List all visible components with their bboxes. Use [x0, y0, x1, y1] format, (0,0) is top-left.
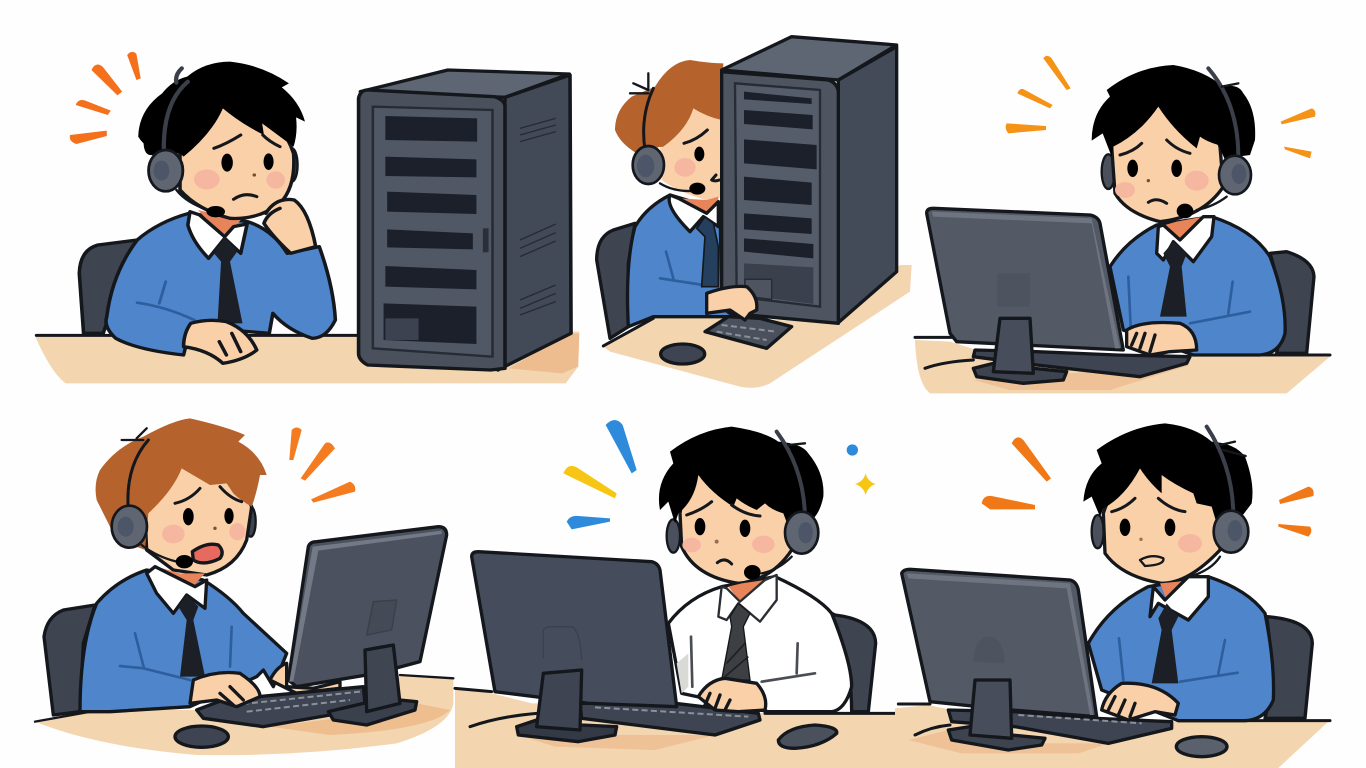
head [1083, 423, 1252, 583]
mouse [778, 725, 837, 748]
cheeks [162, 523, 245, 543]
monitor [288, 527, 447, 725]
desk [455, 688, 895, 768]
desk [35, 332, 579, 383]
server tower [359, 70, 571, 370]
body in blue shirt [627, 195, 760, 327]
head [1092, 65, 1255, 222]
chair [44, 605, 95, 715]
monitor stand [993, 318, 1033, 373]
headset [630, 73, 705, 195]
keyboard [705, 317, 792, 348]
monitor [927, 208, 1123, 383]
neck and collar [188, 210, 247, 258]
desk [895, 704, 1330, 768]
server drive slots [384, 116, 477, 344]
monitor [472, 552, 677, 742]
headset [1177, 68, 1251, 218]
monitor base [517, 720, 617, 742]
face [1103, 460, 1220, 583]
desk [35, 675, 453, 755]
orange stress marks [289, 427, 355, 503]
cheeks [1115, 171, 1209, 198]
left hand [190, 672, 260, 707]
monitor base [948, 727, 1045, 750]
chair [1265, 617, 1312, 718]
chair [1270, 252, 1314, 353]
scene: worker at monitor, bottom right [895, 423, 1330, 768]
cheeks [194, 169, 285, 189]
mouse [175, 726, 228, 747]
orange stress marks [1006, 56, 1315, 158]
hair [138, 62, 305, 157]
head [138, 62, 305, 218]
cable [470, 713, 537, 727]
facial features [687, 502, 760, 564]
chair [79, 240, 137, 333]
hand [1102, 683, 1178, 720]
headset [1190, 427, 1248, 577]
headset [112, 428, 193, 568]
neck and collar [1150, 577, 1208, 620]
desk [915, 337, 1330, 393]
facial features [1112, 498, 1185, 566]
keyboard [973, 350, 1190, 377]
keyboard [948, 710, 1172, 743]
hand [698, 678, 766, 712]
neck and collar [1157, 217, 1214, 262]
scene: worker beside server tower, hand on chin [35, 52, 579, 383]
cable [925, 360, 973, 368]
tie [178, 595, 205, 677]
hand on desk [184, 320, 257, 363]
head [659, 427, 823, 583]
right ear cup [286, 148, 297, 182]
body in blue shirt [106, 213, 335, 355]
orange stress marks [982, 437, 1314, 537]
facial features [214, 135, 280, 199]
face [145, 460, 252, 575]
tie [214, 237, 242, 323]
right hand behind monitor [270, 663, 340, 693]
orange stress marks [70, 52, 141, 144]
mouse [1176, 737, 1227, 757]
server tower [722, 37, 897, 323]
neck and collar [718, 575, 777, 622]
body in blue shirt [1110, 217, 1285, 355]
cheeks [682, 536, 775, 553]
monitor base [328, 700, 417, 725]
colourful stress marks [563, 420, 876, 529]
cheek [1178, 534, 1202, 553]
hand on keyboard [707, 286, 757, 320]
tie [697, 217, 718, 287]
neck and collar [147, 567, 207, 613]
hair [1083, 423, 1252, 523]
left ear cup [1102, 154, 1115, 189]
right ear cup [246, 507, 256, 537]
body in blue shirt [1088, 577, 1274, 721]
keyboard [580, 703, 760, 735]
scene: brown-haired worker talking, bottom left [35, 418, 453, 755]
face [680, 467, 792, 583]
mouse [661, 344, 705, 364]
head [96, 418, 267, 575]
hair [96, 418, 267, 550]
tie [722, 603, 750, 680]
body in blue shirt [80, 570, 287, 712]
cable [915, 725, 950, 735]
server drive slots [744, 92, 817, 258]
hair [1092, 65, 1255, 160]
hand [1127, 322, 1197, 355]
headset [149, 68, 225, 217]
monitor [902, 569, 1097, 750]
facial features [1120, 140, 1190, 203]
monitor stand [365, 645, 400, 712]
keyboard [197, 687, 365, 727]
facial features [175, 487, 242, 563]
monitor stand [970, 680, 1012, 738]
body in white shirt [668, 577, 852, 712]
chair [597, 223, 635, 338]
headset [744, 432, 818, 580]
hair [659, 427, 823, 527]
side vents [520, 118, 556, 315]
scene: worker at monitor, top right [915, 56, 1330, 393]
monitor base [973, 363, 1067, 383]
left ear cup [667, 519, 680, 553]
desk [603, 265, 912, 388]
scene: worker hidden behind server tower [597, 37, 912, 388]
tie [1160, 242, 1187, 317]
face [1112, 97, 1223, 222]
face [660, 90, 723, 200]
cheek [674, 158, 696, 177]
hand on chin [264, 199, 316, 253]
tie [1152, 603, 1178, 683]
face [180, 97, 294, 218]
scene: worker in white shirt, bottom centre [455, 420, 895, 768]
chair [832, 613, 876, 712]
hair [615, 60, 723, 153]
facial features [684, 130, 719, 181]
neck and collar [669, 195, 718, 232]
left ear cup [1092, 515, 1104, 548]
monitor stand [537, 670, 582, 730]
